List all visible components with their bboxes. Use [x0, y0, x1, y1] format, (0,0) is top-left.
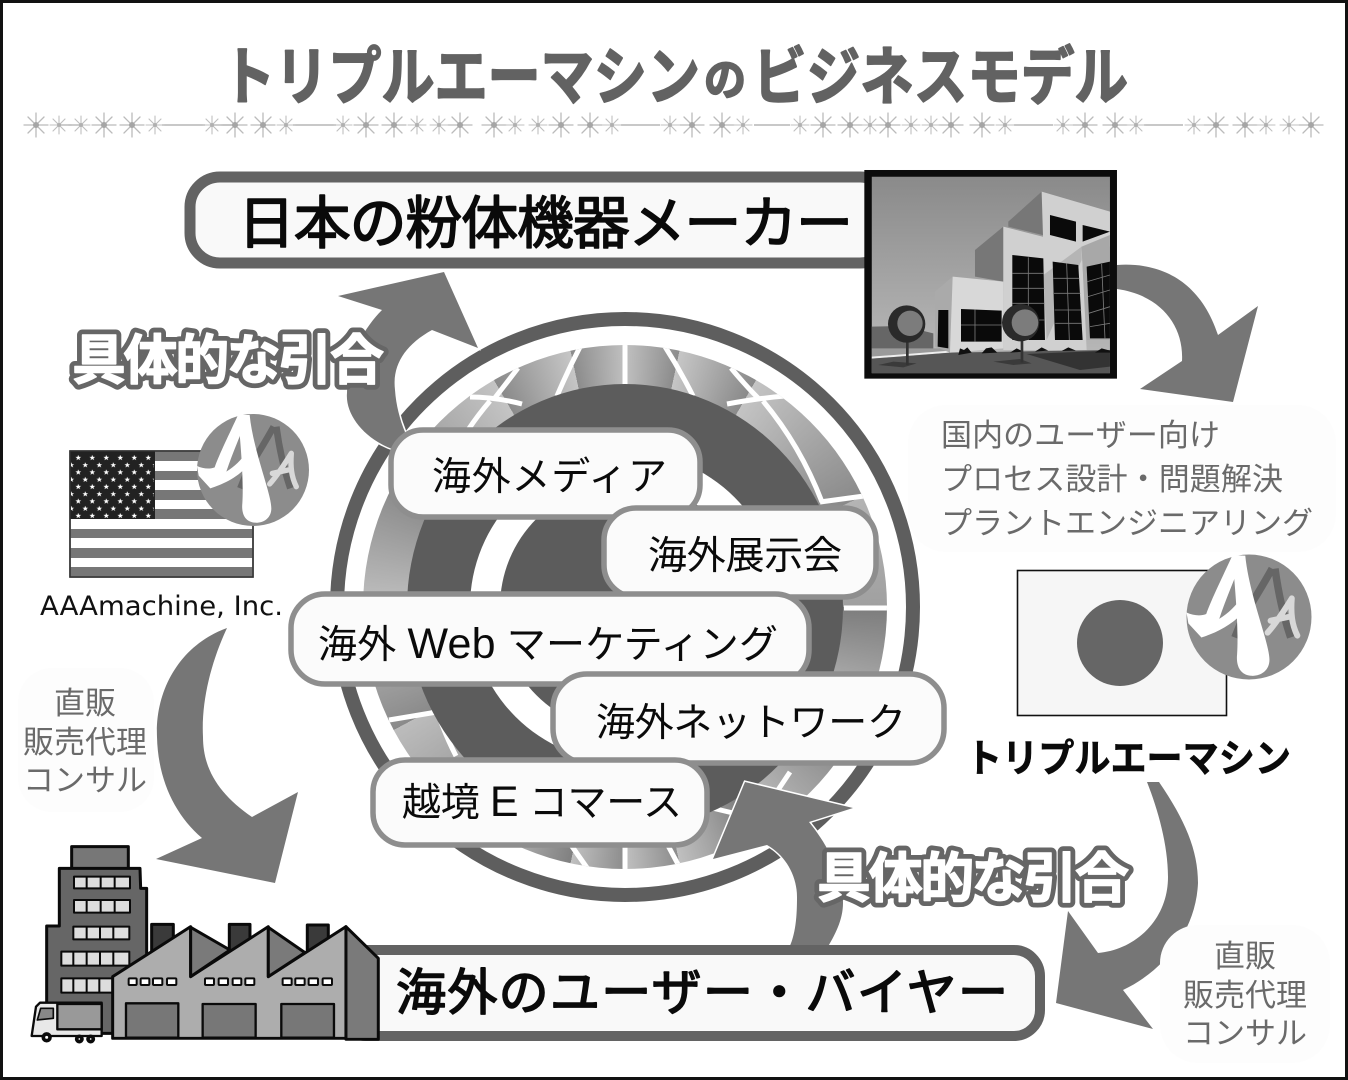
text block: right sales channels: 販売代理: [1183, 978, 1307, 1013]
text block: domestic services: プラントエンジニアリング: [941, 506, 1313, 541]
company name: Triple A Machine: トリプルエーマシン: [966, 738, 1291, 781]
arrow: from maker to domestic services: [1117, 265, 1258, 402]
pill: overseas exhibitions: 海外展示会: [648, 535, 842, 578]
pill: overseas media: [391, 430, 700, 517]
text block: right sales channels: コンサル: [1183, 1016, 1307, 1051]
pill: overseas network: 海外ネットワーク: [596, 702, 906, 745]
title: トリプルエーマシン: [222, 43, 700, 113]
text block: right sales channels: 直販: [1214, 939, 1276, 974]
pill: overseas web marketing: 海外 Web マーケティング: [318, 620, 778, 668]
logo: Triple A Machine (Japan): [1187, 555, 1311, 679]
text block: left sales channels: 直販: [54, 686, 116, 721]
globe: [337, 319, 913, 895]
text block: right sales channels: [1160, 925, 1330, 1063]
text block: domestic services: 国内のユーザー向け: [941, 418, 1220, 453]
text block: left sales channels: [18, 668, 154, 812]
title: ビジネスモデル: [753, 43, 1128, 113]
arrow: from AAAmachine Inc to overseas buyers: [156, 628, 298, 883]
label: concrete inquiries (bottom right): 具体的な引合: [817, 849, 1129, 909]
arrow: from overseas buyers to globe: [713, 782, 853, 950]
text block: domestic services: [908, 405, 1336, 552]
arrow: from Triple A Machine to overseas buyers: [1056, 782, 1198, 1029]
pill: cross-border e-commerce: [373, 760, 707, 845]
label: concrete inquiries (left): 具体的な引合: [72, 331, 384, 391]
photo: office building: [864, 170, 1117, 379]
company name: AAAmachine, Inc.: AAAmachine, Inc.: [40, 591, 283, 622]
text block: left sales channels: 販売代理: [23, 725, 147, 760]
illustration: factory and office tower with truck: [32, 847, 378, 1042]
heading pill: Japanese powder equipment maker: [190, 177, 890, 263]
label: concrete inquiries (left): 具体的な引合: [72, 331, 384, 391]
text block: domestic services: プロセス設計・問題解決: [941, 462, 1283, 497]
Japanese flag: [1018, 570, 1226, 716]
title: [222, 43, 1128, 113]
title: の: [704, 56, 746, 105]
heading pill: overseas users and buyers: [340, 950, 1040, 1036]
arrow: to Japanese maker: [338, 272, 478, 450]
label: concrete inquiries (bottom right): 具体的な引合: [817, 849, 1129, 909]
pill: cross-border e-commerce: 越境 E コマース: [402, 778, 682, 826]
pill: overseas media: 海外メディア: [432, 456, 667, 499]
heading pill: overseas users and buyers: 海外のユーザー・バイヤー: [396, 965, 1008, 1021]
heading pill: Japanese powder equipment maker: 日本の粉体機器メーカー: [238, 192, 853, 256]
pill: overseas web marketing: [291, 594, 809, 684]
text block: left sales channels: コンサル: [23, 763, 147, 798]
logo: AAAmachine (US): [197, 414, 309, 526]
pill: overseas network: [553, 674, 944, 763]
pill: overseas exhibitions: [604, 508, 876, 597]
US flag: [70, 451, 253, 577]
